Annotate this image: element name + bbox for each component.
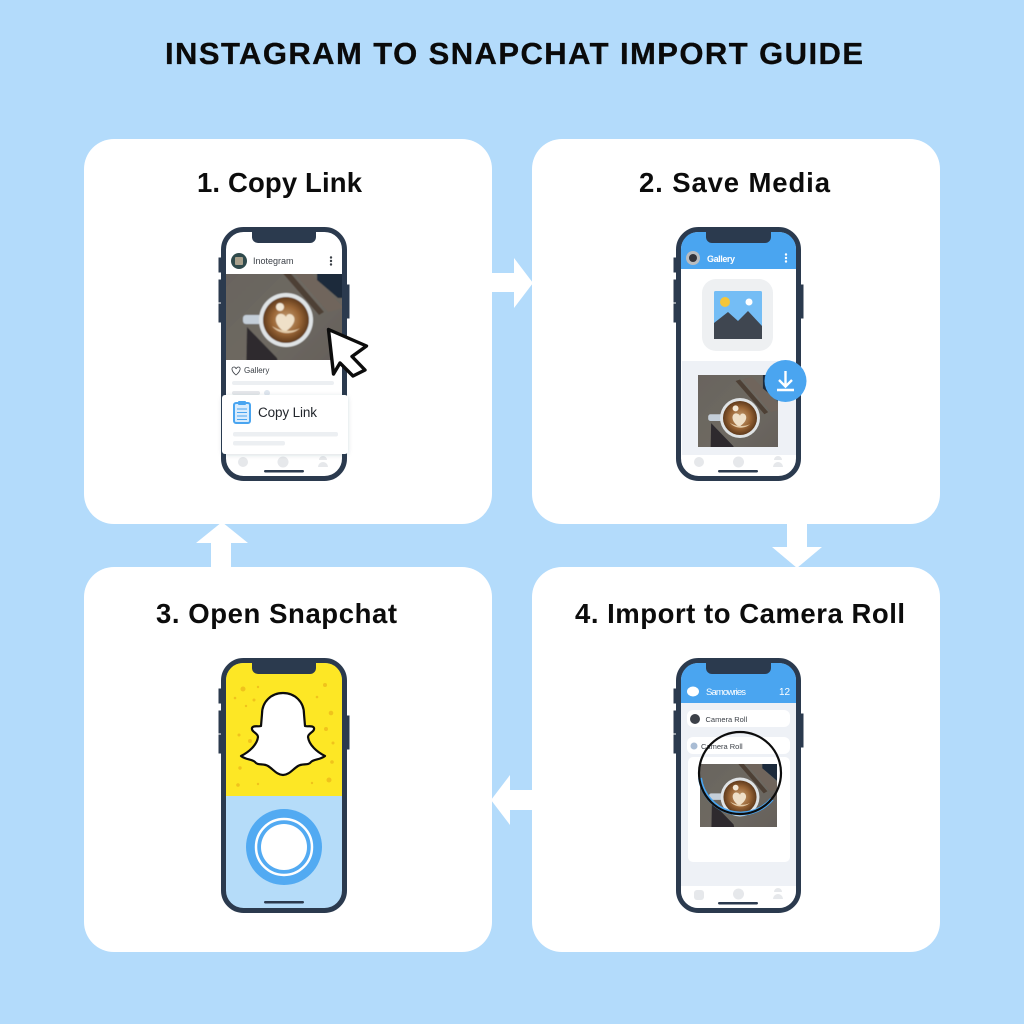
app header: Samowries: [706, 687, 746, 698]
bottom nav: [694, 456, 783, 468]
post caption: [232, 366, 334, 396]
heading: step 2: 2. Save Media: [639, 167, 831, 198]
list row: selected album: [687, 737, 790, 754]
app header: [687, 686, 791, 698]
bottom nav: [238, 456, 328, 468]
app header: Gallery: [707, 254, 735, 264]
capture button: [246, 809, 322, 885]
phone: gallery: [674, 227, 806, 481]
icon: image placeholder: [702, 279, 773, 351]
list row: camera roll: [687, 710, 790, 727]
app header: [231, 253, 332, 269]
copy link popup: Copy Link: [258, 405, 317, 420]
heading: step 4: 4. Import to Camera Roll: [575, 598, 905, 629]
phone: instagram post: [218, 227, 350, 481]
yellow speckles: [234, 683, 334, 787]
icon: download button: [764, 360, 806, 402]
phone: snapchat app: [219, 660, 349, 910]
copy link popup: [222, 395, 348, 454]
heading: step 1: 1. Copy Link: [197, 167, 363, 198]
arrow: step 1 to step 2: [490, 258, 533, 308]
panel: step 4 import to camera roll: [532, 567, 940, 952]
arrow: step 4 to step 3: [491, 775, 534, 825]
icon: mouse cursor: [328, 330, 366, 376]
phone: camera roll: [674, 658, 804, 913]
album panel: [688, 757, 790, 862]
panel: step 1 copy link: [84, 139, 492, 524]
app header: 12: [779, 687, 791, 698]
coffee photo: [700, 764, 777, 827]
magnifier ring: [699, 732, 781, 814]
list row: selected album: Camera Roll: [701, 742, 743, 751]
arrow: step 3 to step 1: [196, 522, 248, 569]
title: INSTAGRAM TO SNAPCHAT IMPORT GUIDE: [165, 36, 863, 71]
coffee photo: [226, 274, 342, 360]
app header: [686, 251, 787, 265]
icon: snapchat ghost: [241, 693, 325, 775]
coffee photo: [698, 375, 778, 447]
panel: step 3 open snapchat: [84, 567, 492, 952]
app header: Inotegram: [253, 256, 294, 266]
arrow: step 2 to step 4: [772, 522, 822, 568]
heading: step 3: 3. Open Snapchat: [156, 598, 397, 629]
icon: clipboard: [234, 401, 250, 423]
list row: camera roll: Camera Roll: [706, 715, 748, 724]
bottom nav: [694, 888, 783, 900]
post caption: Gallery: [244, 366, 269, 375]
panel: step 2 save media: [532, 139, 940, 524]
